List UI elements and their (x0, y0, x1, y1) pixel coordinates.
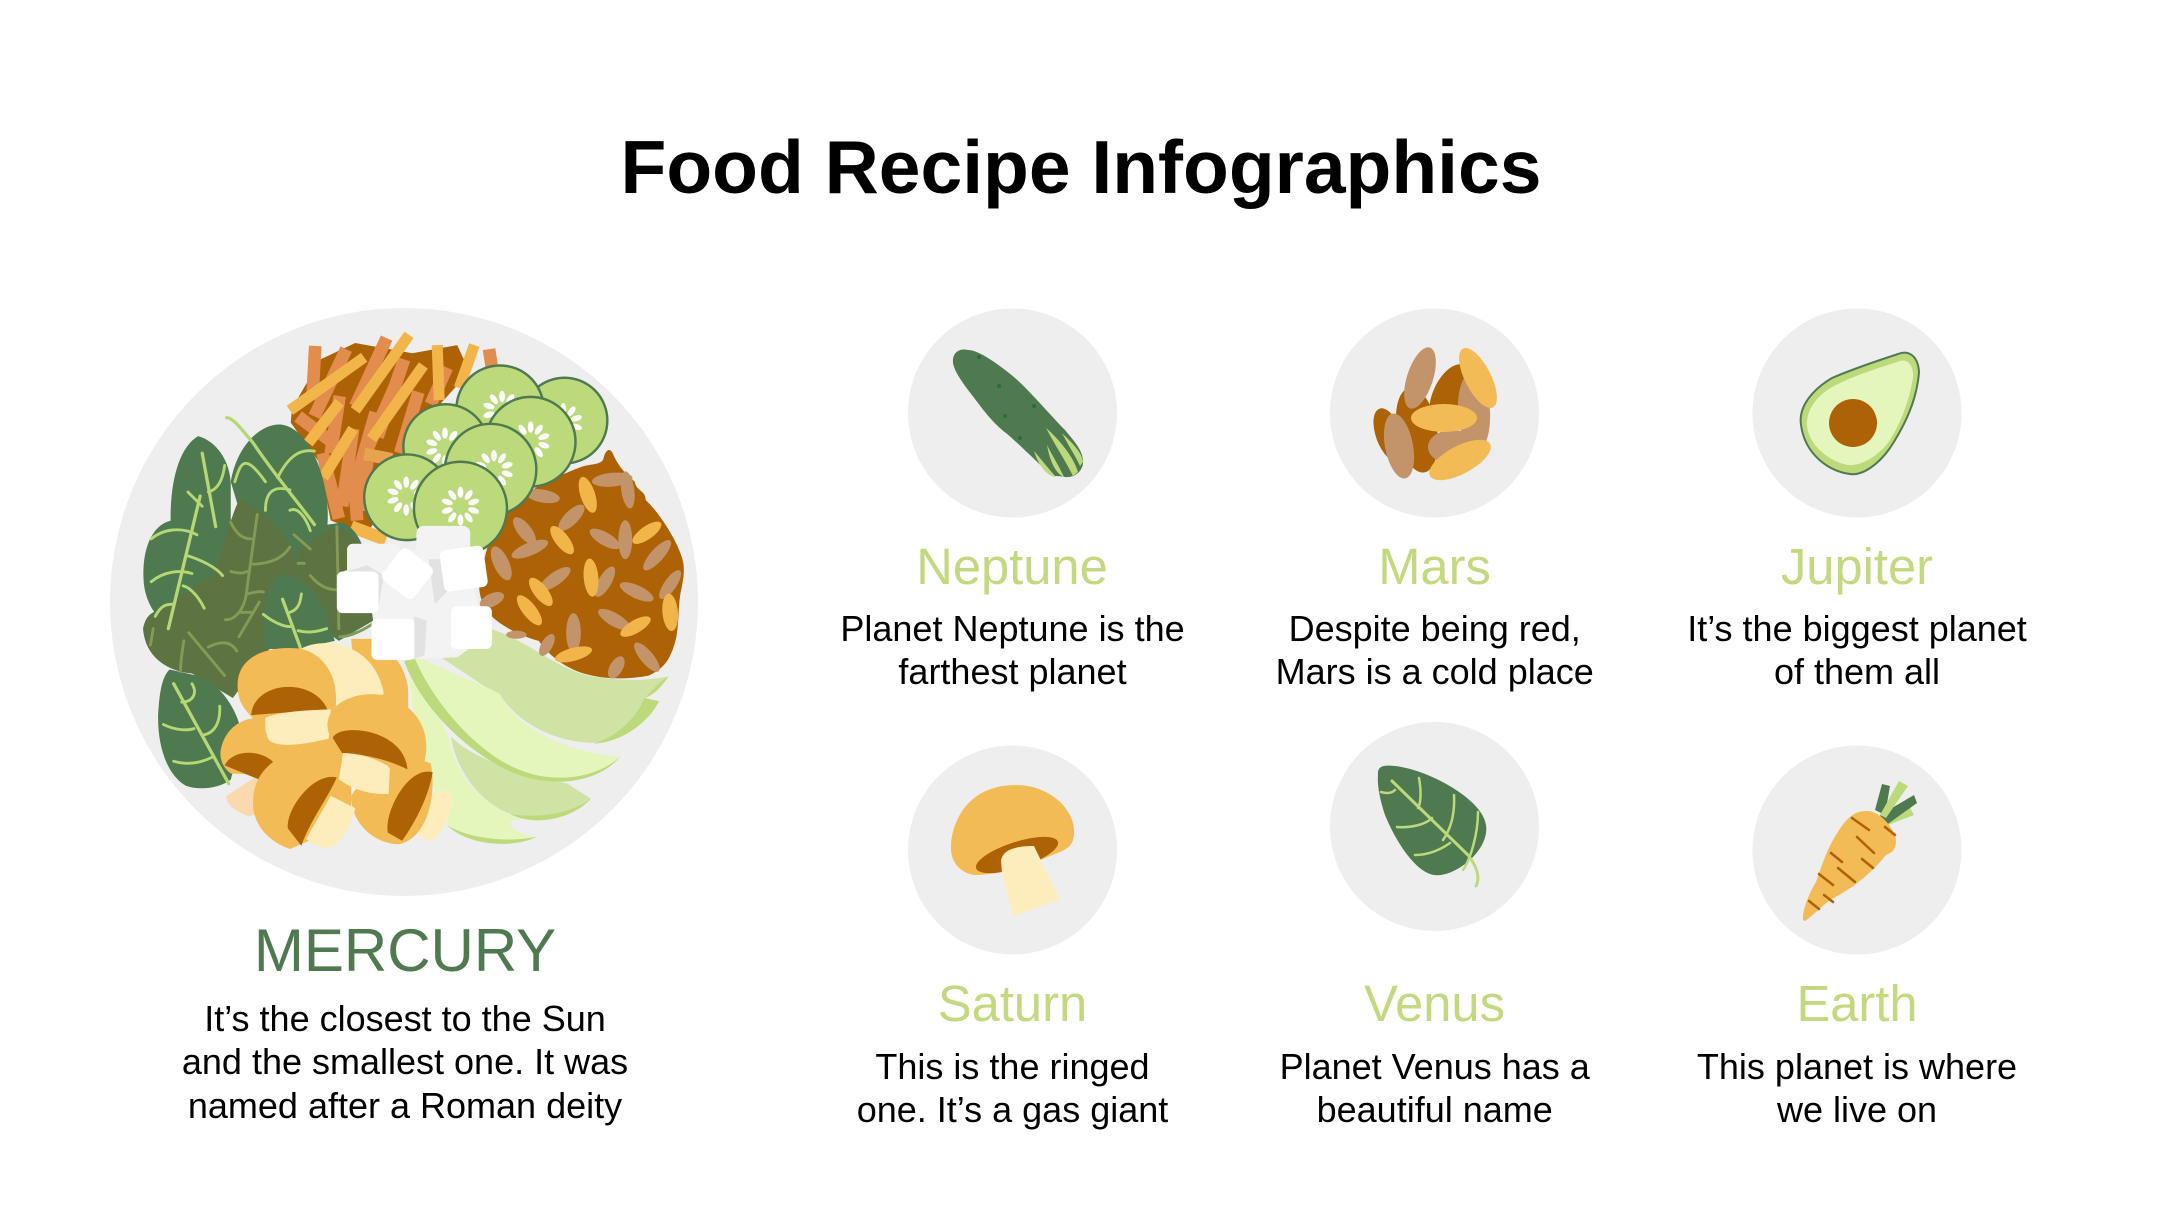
plate background (110, 308, 698, 896)
avocado slices (404, 629, 669, 844)
icon: leaf (1378, 766, 1486, 886)
description: beautiful name (1317, 1089, 1553, 1130)
description: Despite being red, (1289, 608, 1581, 649)
panel: neptune (840, 308, 1185, 692)
mushrooms (220, 639, 452, 849)
panel: mercury plate (110, 308, 698, 896)
icon circle (1752, 308, 1962, 518)
description: Mars is a cold place (1276, 651, 1594, 692)
icon: rice grains (1367, 343, 1505, 488)
panel: jupiter (1687, 308, 2027, 692)
text: mercury description: and the smallest one. It was (182, 1041, 628, 1082)
icon: carrot (1803, 781, 1917, 921)
tofu cubes (337, 526, 492, 660)
icon: mushroom (951, 785, 1074, 916)
text: mercury description: named after a Roman deity (188, 1085, 622, 1126)
panel: earth (1697, 746, 2017, 1130)
icon circle (908, 746, 1117, 954)
panel: venus (1280, 722, 1591, 1130)
description: farthest planet (898, 651, 1127, 692)
spinach leaves (143, 418, 374, 788)
description: Planet Venus has a (1280, 1046, 1591, 1087)
panel: mars (1276, 308, 1594, 692)
carrot sticks (290, 335, 492, 540)
description: This is the ringed (875, 1046, 1150, 1087)
description: Planet Neptune is the (840, 608, 1185, 649)
description: we live on (1776, 1089, 1937, 1130)
icon: avocado (1801, 353, 1919, 474)
title: Food Recipe Infographics (621, 125, 1541, 209)
text: mercury description: It’s the closest to the Sun (204, 998, 606, 1039)
plate food illustration (143, 335, 685, 849)
heading: Earth (1796, 975, 1918, 1032)
icon circle (908, 308, 1117, 518)
description: It’s the biggest planet (1687, 608, 2027, 649)
icon circle (1330, 722, 1539, 931)
icon circle (1752, 746, 1962, 954)
panel: saturn (857, 746, 1168, 1130)
heading: mercury: MERCURY (254, 917, 556, 984)
description: of them all (1774, 651, 1940, 692)
heading: Neptune (916, 538, 1108, 595)
heading: Venus (1364, 975, 1505, 1032)
cucumber slices (364, 365, 607, 555)
icon: cucumber (953, 350, 1083, 477)
description: This planet is where (1697, 1046, 2017, 1087)
heading: Jupiter (1781, 538, 1933, 595)
rice patty (477, 450, 685, 681)
icon circle (1330, 308, 1539, 518)
heading: Saturn (938, 975, 1087, 1032)
heading: Mars (1378, 538, 1491, 595)
description: one. It’s a gas giant (857, 1089, 1168, 1130)
